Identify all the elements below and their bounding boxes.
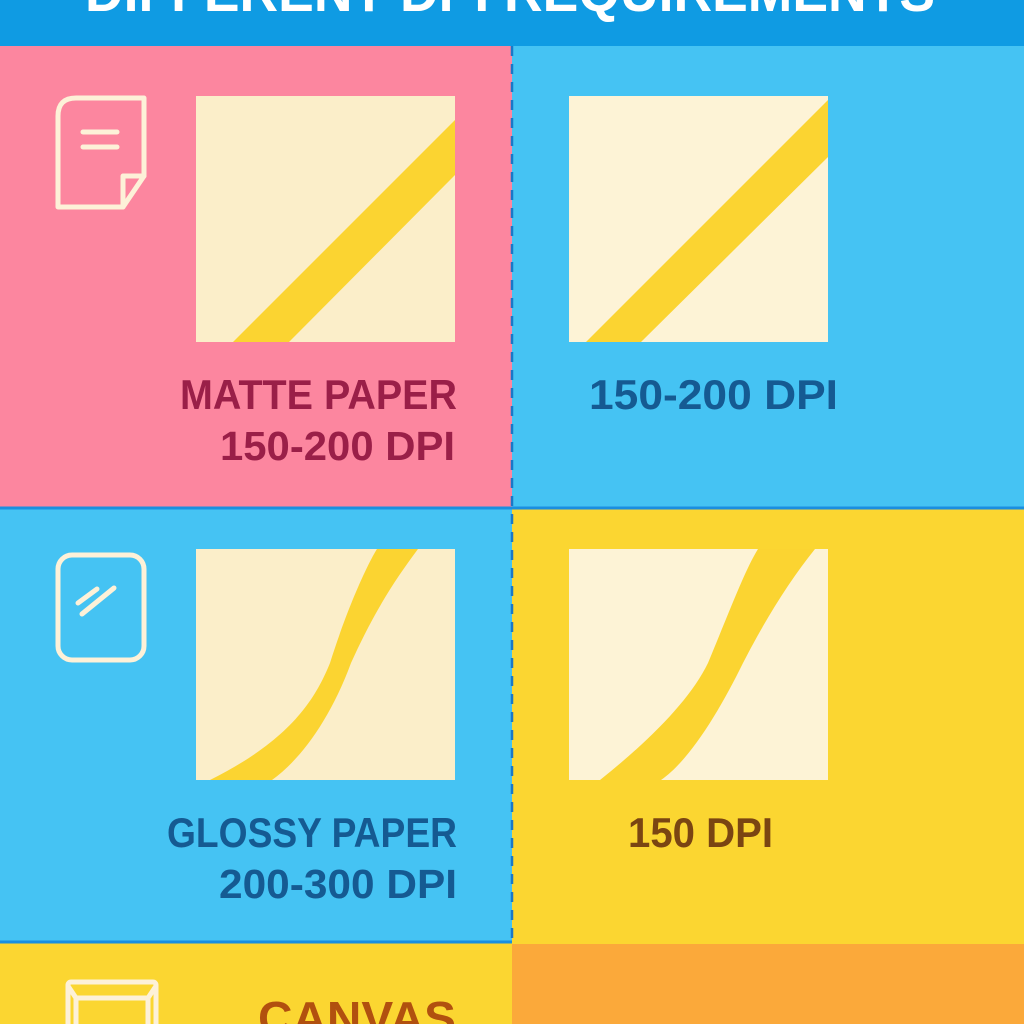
label: glossy paper: GLOSSY PAPER	[167, 809, 457, 856]
icon: glossy sheet	[58, 555, 144, 660]
sample square: matte smooth	[569, 96, 828, 342]
panel: glossy right	[512, 508, 1024, 943]
sample square: glossy	[196, 549, 455, 780]
label: dpi: 150-200 DPI	[589, 371, 838, 418]
icon: document	[58, 98, 144, 207]
sample square: matte	[196, 96, 455, 342]
panel: canvas	[0, 943, 512, 1024]
label: matte paper: MATTE PAPER	[180, 371, 457, 418]
panel: matte right	[512, 46, 1024, 508]
panel: canvas right	[512, 944, 1024, 1024]
label: matte dpi: 150-200 DPI	[220, 423, 455, 469]
sample square: glossy smooth	[569, 549, 828, 780]
header bar	[0, 0, 1024, 46]
panel: matte paper	[0, 46, 512, 508]
label: 150 dpi: 150 DPI	[628, 809, 773, 856]
panel: glossy paper	[0, 508, 512, 943]
icon: canvas frame	[68, 982, 156, 1024]
label: glossy dpi: 200-300 DPI	[219, 861, 457, 907]
